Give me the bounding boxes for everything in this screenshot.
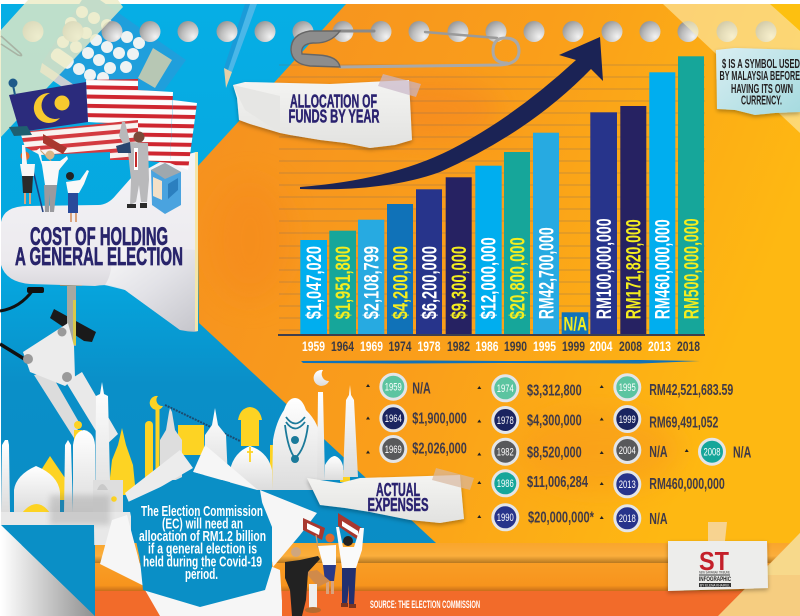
bar 1995: RM42,700,000 [536,227,558,319]
illustration: malaysian flag [8,78,197,170]
torn note: actual expenses: EXPENSES [368,495,428,515]
panel: orange bands at bottom [95,533,800,616]
bar 1999: N/A [564,314,587,336]
panel: orange chart background [197,4,800,543]
badge years: 1959 [385,382,402,394]
year labels [302,338,700,354]
bar 2013 [649,72,675,335]
election commission text: (EC) will need an [162,516,243,532]
icon: ballot box [151,163,181,214]
year labels: 1978 [418,338,441,354]
expense values: N/A [649,444,668,461]
base buildings [93,480,123,512]
badge years: 1986 [497,478,514,490]
brush stroke divider [301,360,700,364]
expense values: N/A [649,511,668,528]
expense values: $8,520,000 [527,444,582,462]
arrow: rising trend [300,37,603,189]
woman [318,534,336,594]
illustration: paper skyline of landmarks [1,370,358,513]
bar 2008: RM171,820,000 [622,219,646,319]
expense values: N/A [412,380,431,398]
bar 2004 [590,112,617,335]
statue necklace [285,417,308,458]
year labels: 1986 [476,338,499,354]
year labels: 1969 [360,338,383,354]
icon: calculator [40,0,186,136]
voter 1 [20,145,35,204]
icon: lamp arm [0,283,118,446]
bar 1986: $12,000,000 [478,237,500,319]
bar 2018 [678,56,704,335]
election commission text: if a general election is [148,540,257,558]
chart axis [278,334,705,336]
flag canton [9,82,88,132]
badge years: 1995 [619,382,636,394]
badge years: 1990 [497,512,514,524]
cross on church [247,447,253,462]
badge years: 1974 [497,383,514,395]
folded paper corner [1,525,95,616]
title: COST OF HOLDING [30,223,168,251]
year labels: 1982 [447,338,470,354]
election commission text: held during the Covid-19 [143,554,262,570]
year badges [381,374,724,531]
illustration: voters group [9,126,89,222]
illustration: people at podium with placards [285,513,364,616]
torn note: allocation of funds by year: ALLOCATION OF [290,92,377,112]
bridge cables [165,405,240,441]
bar 1964: $1,951,800 [332,246,355,319]
badge years: 2013 [619,479,636,491]
voter 2 [37,148,68,212]
icon: lamp head [1,152,198,332]
fold shadow [50,495,110,525]
placards [303,518,325,540]
bar 1982: $9,300,000 [448,246,471,319]
bar 1995 [533,133,559,335]
bar 1959: $1,047,020 [303,246,326,319]
icon: paperclip [1,36,22,56]
expense values [412,380,752,528]
gray and white towers [160,408,182,480]
torn edges [100,445,317,616]
election commission text: period. [185,566,218,583]
year labels: 2013 [648,338,671,354]
expense values: RM69,491,052 [649,414,718,432]
expense values: $2,026,000 [412,440,467,458]
logo: new sarawak tribune infographic note: INFOGRAPHIC [699,577,732,583]
paper punch holes [22,21,776,42]
expense values: N/A [733,444,752,462]
tape top right [663,4,800,133]
ripped circular window [128,472,272,607]
torn note: allocation of funds by year: FUNDS BY YEAR [288,106,380,126]
back man in black suit [285,547,320,616]
bar 2004: RM100,000,000 [593,218,616,319]
expense values: $1,900,000 [412,410,467,428]
badge years: 1964 [385,413,402,425]
icon: pencil [224,4,257,88]
year labels: 1990 [504,338,527,354]
bar 1990: $20,800,000 [506,237,530,319]
bar 1978: $6,200,000 [418,246,442,319]
logo: new sarawak tribune infographic note [668,522,768,591]
year labels: 1964 [331,338,354,354]
election commission text: The Election Commission [141,503,263,520]
expense values: $11,006,284 [527,474,588,491]
bar chart: allocation of funds by year [278,56,705,354]
bar 2013: RM460,000,000 [652,219,674,319]
expense values: RM460,000,000 [649,476,725,493]
election commission text [139,503,266,583]
voter 3 [66,170,89,222]
notebook ruled lines [279,65,705,330]
badge years: 2008 [704,446,720,458]
paper strip under skyline [1,512,131,545]
title: A GENERAL ELECTION [15,243,183,271]
year labels: 1974 [388,338,412,354]
podium [305,570,330,613]
title [15,223,183,271]
bar 1978 [416,189,442,335]
logo: new sarawak tribune infographic note: BY ELENA KHAIRUL [700,583,730,587]
year labels: 2008 [619,338,642,354]
expense values: RM42,521,683.59 [649,382,733,399]
man in white shirt [336,527,364,608]
year labels: 1999 [562,338,585,354]
bullet markers [366,384,689,519]
torn note: allocation of funds by year [233,74,421,148]
icon: safety pin [291,31,519,67]
torn note: actual expenses: ACTUAL [376,480,420,500]
source: SOURCE: THE ELECTION COMMISSION [370,599,480,611]
crescent and star [34,93,60,123]
bar 1974: $4,200,000 [390,246,412,319]
illustration: man with megaphone [116,122,149,208]
expense values: $20,000,000* [528,510,595,526]
bar 1959 [300,240,327,335]
badge years: 1978 [497,415,514,427]
election commission text: allocation of RM1.2 billion [139,528,266,545]
year labels: 1995 [533,338,556,354]
expense values: $3,312,800 [527,382,582,400]
year labels: 2018 [677,338,700,354]
icon: tape top left [0,0,123,138]
year labels: 2004 [590,338,613,354]
badge years: 1982 [497,446,514,458]
yellow landmarks [38,396,350,500]
bar 2008 [620,106,646,335]
bar 2018: RM500,000,000 [680,218,704,319]
bar 1982 [446,177,472,335]
bar 1990 [504,152,530,335]
badge years: 2018 [619,513,636,525]
expense values: $4,300,000 [527,412,582,430]
bar 1969: $2,108,799 [360,246,384,319]
year labels: 1959 [302,338,325,354]
badge years: 2004 [619,445,636,457]
bar 1986 [475,166,502,335]
bar 1999 [562,312,588,336]
logo: new sarawak tribune infographic note: NEW SARAWAK TRIBUNE [699,570,730,574]
badge years: 1999 [619,414,636,426]
bar 1964 [329,231,356,335]
badge years [385,382,720,525]
badge years: 1969 [385,444,402,456]
torn paper hole [100,445,317,616]
expenses list [366,374,752,531]
callout: dollar symbol note [716,48,800,115]
torn note: actual expenses [307,468,474,523]
logo: new sarawak tribune infographic note: ST [699,546,729,576]
